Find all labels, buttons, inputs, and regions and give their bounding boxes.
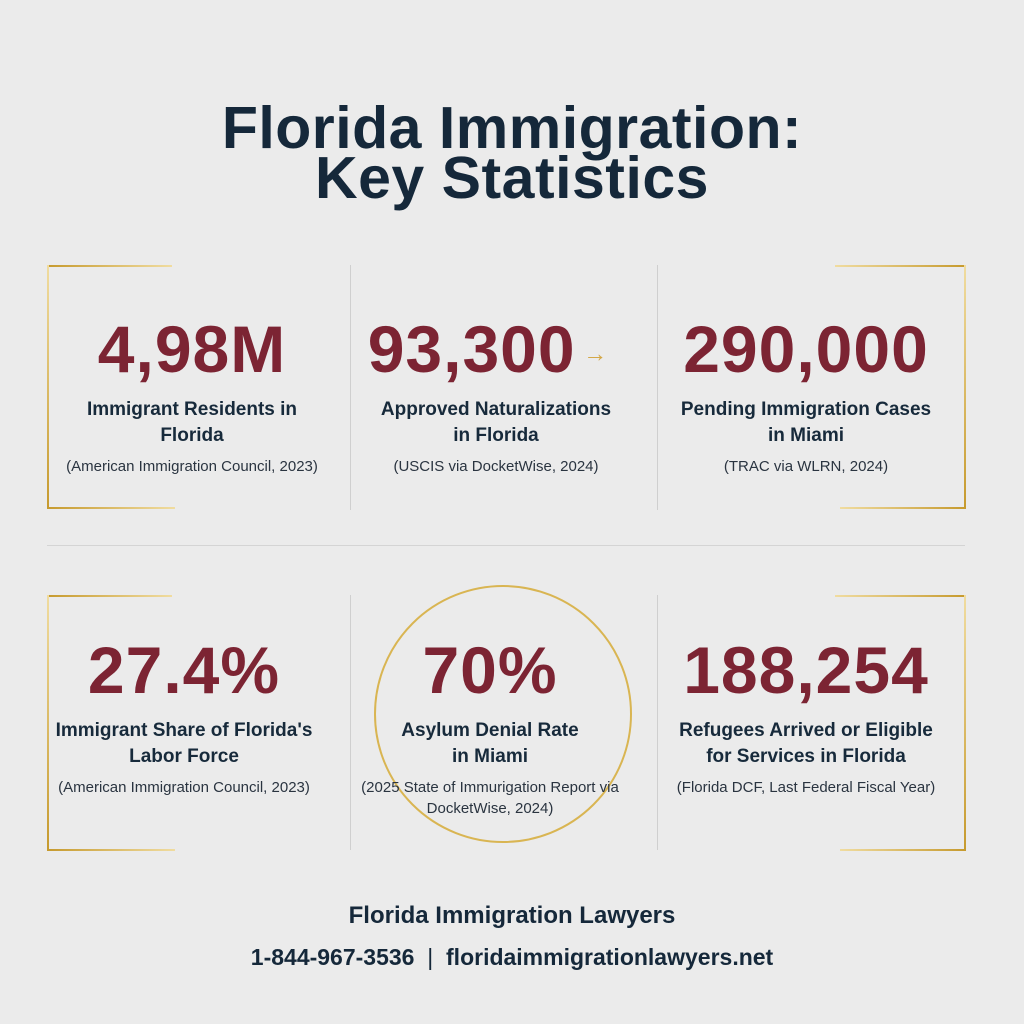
stat 2: Approved Naturalizations [381,399,611,420]
stat 3: (TRAC via WLRN, 2024) [724,458,888,475]
circle [374,585,632,843]
stat 6: Refugees Arrived or Eligible [679,720,933,741]
gold frames [47,265,172,267]
stat 2: 93,300 → [368,312,608,386]
stat 2 [368,312,611,475]
stat 1 [66,312,318,475]
stat 4: 27.4% [88,633,280,707]
dividers [350,265,351,510]
title: Key Statistics [315,145,709,211]
stat 1: 4,98M [98,312,286,386]
stat 3: in Miami [768,425,844,446]
title: Florida Immigration: [222,95,802,161]
footer: Florida Immigration Lawyers [349,902,675,929]
stat 3: Pending Immigration Cases [681,399,931,420]
stat 1: (American Immigration Council, 2023) [66,458,318,475]
contact line: 1-844-967-3536 | floridaimmigrationlawyers.net [251,944,773,970]
title [222,95,802,211]
stat 4 [56,633,312,796]
stat 6 [677,633,935,796]
stat 5: in Miami [452,746,528,767]
stat 6: for Services in Florida [706,746,906,767]
stat 4: Immigrant Share of Florida's [56,720,312,741]
stat 6: 188,254 [683,633,929,707]
stat 2: in Florida [453,425,539,446]
stat 6: (Florida DCF, Last Federal Fiscal Year) [677,779,935,796]
stat 1: Florida [160,425,224,446]
stat 3 [681,312,931,475]
stat 5: (2025 State of Immurigation Report via [361,779,619,796]
stat 5 [361,633,619,817]
stat 5: DocketWise, 2024) [427,800,553,817]
stat 1: Immigrant Residents in [87,399,297,420]
stat 2: (USCIS via DocketWise, 2024) [393,458,599,475]
stat 3: 290,000 [683,312,929,386]
stat 4: (American Immigration Council, 2023) [58,779,310,796]
stat 4: Labor Force [129,746,239,767]
stat 5: 70% [422,633,558,707]
stat 5: Asylum Denial Rate [401,720,579,741]
